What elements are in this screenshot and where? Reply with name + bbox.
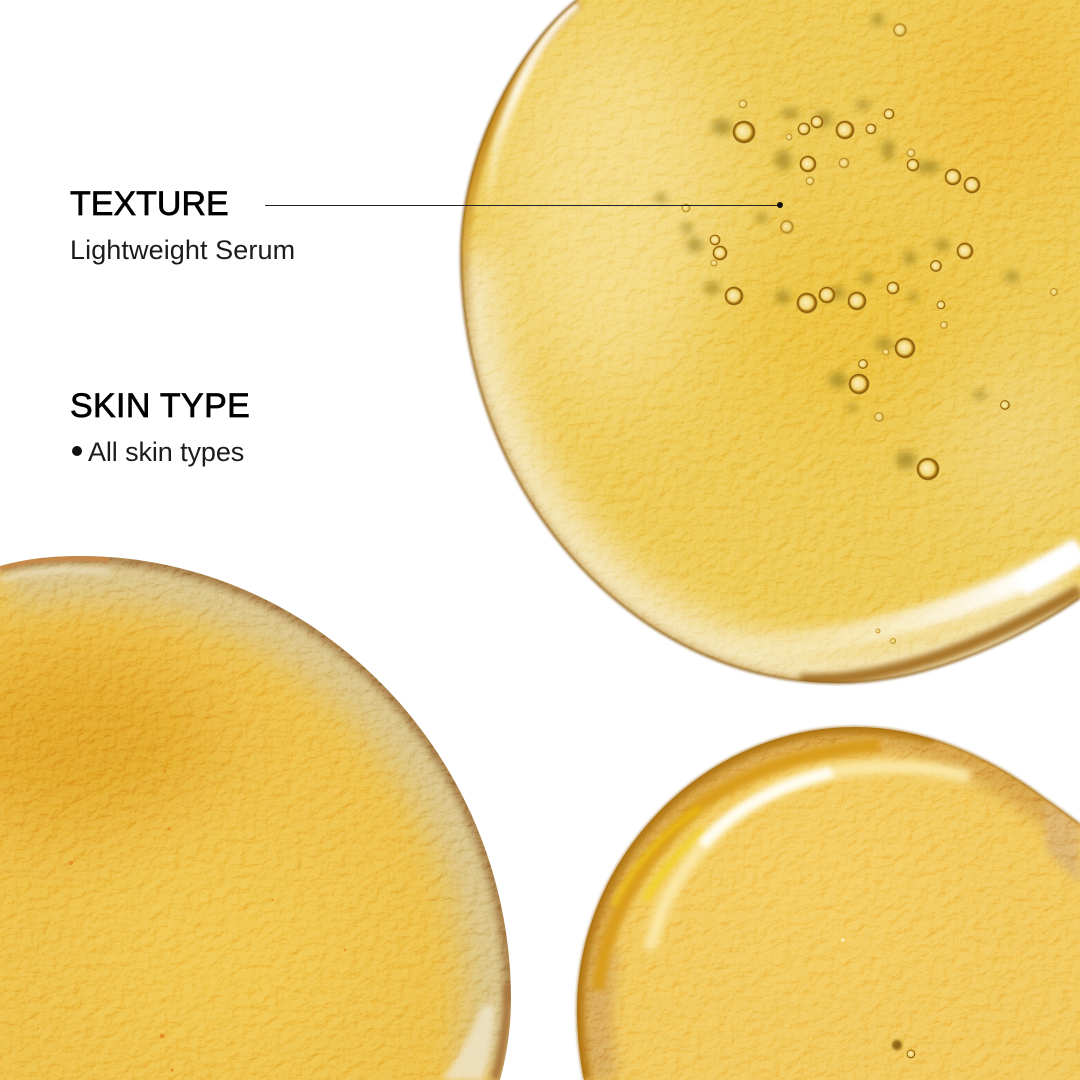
- bubble shadows: [655, 14, 1019, 469]
- bullet: [72, 446, 82, 456]
- drop: bottom right: [575, 725, 1080, 1080]
- heading: texture: TEXTURE: [70, 185, 229, 223]
- callout line with dot: [265, 202, 783, 208]
- heading: skin type: SKIN TYPE: [70, 387, 250, 425]
- text: lightweight serum: Lightweight Serum: [70, 235, 295, 265]
- drop: top right with bubbles: [455, 0, 1080, 684]
- bubbles: [710, 108, 1010, 480]
- drop: bottom left: [0, 550, 515, 1080]
- orange specks: [69, 770, 346, 1072]
- text: all skin types: [72, 437, 244, 467]
- label: All skin types: [88, 437, 244, 467]
